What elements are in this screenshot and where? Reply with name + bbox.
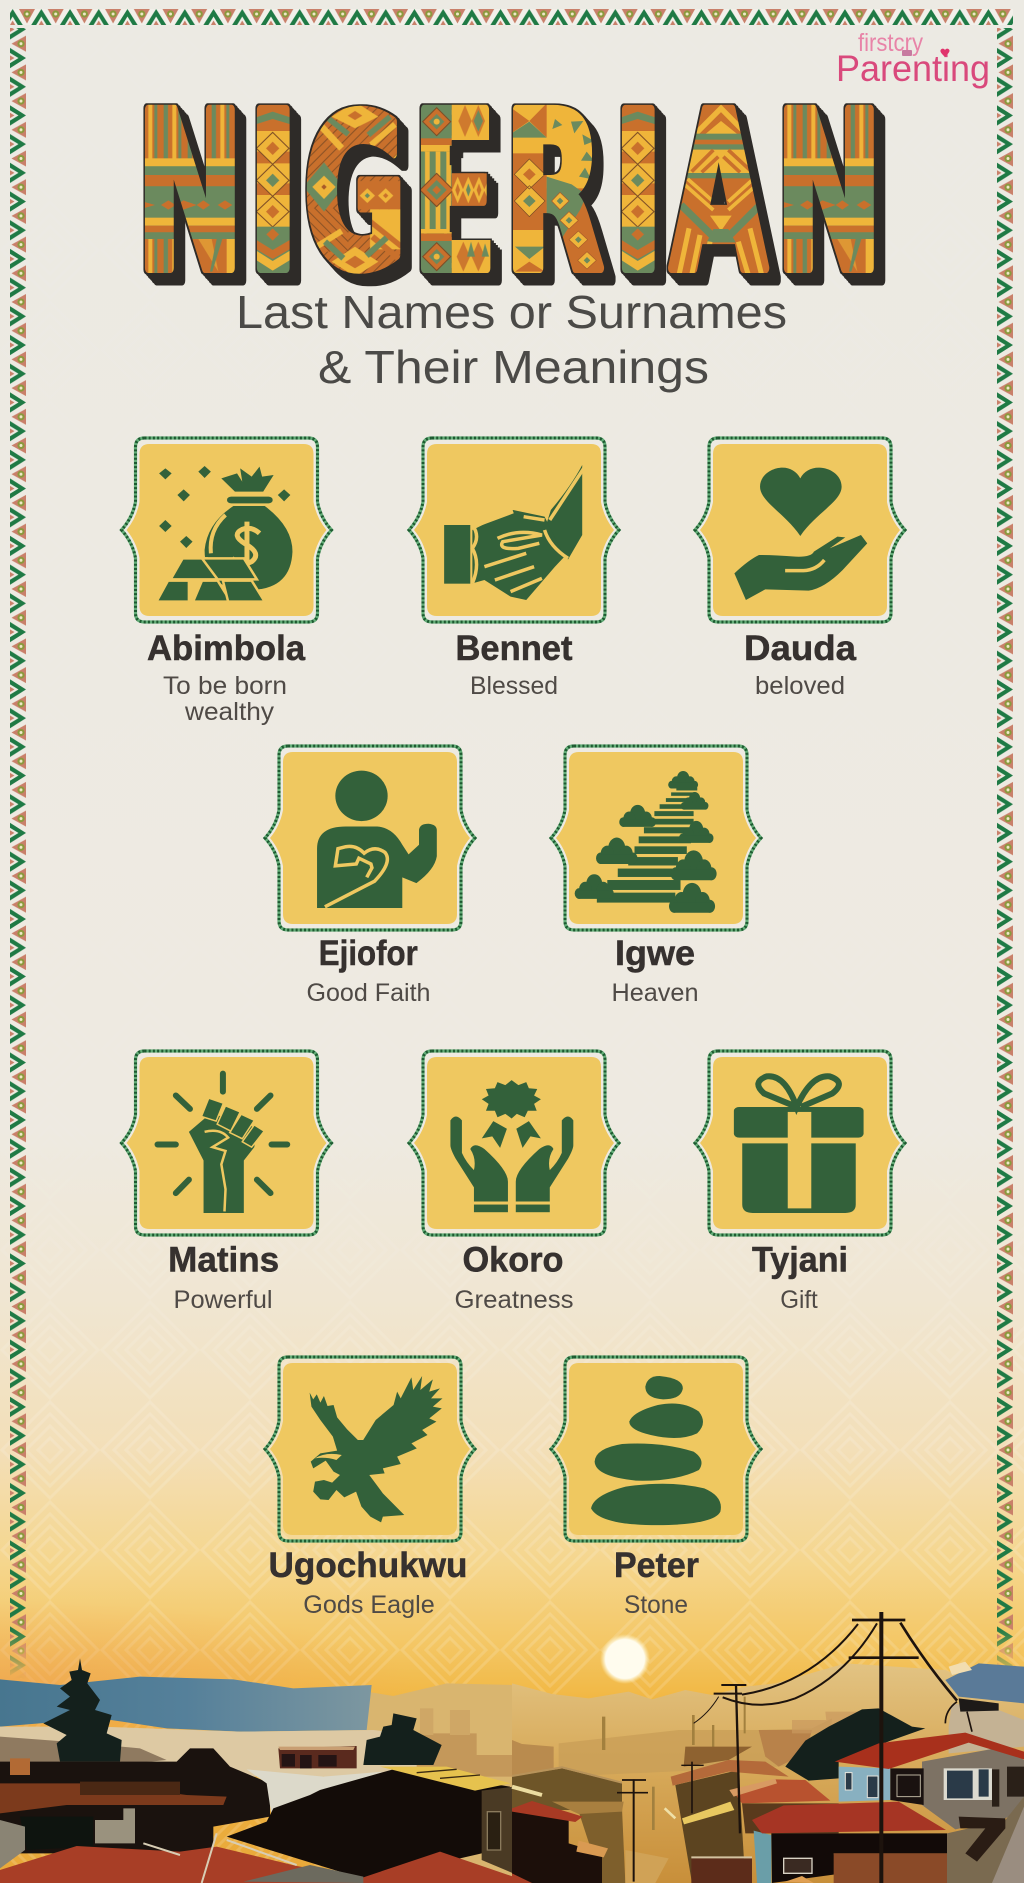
icon: handshake bbox=[444, 465, 584, 600]
icon: raised fist with rays bbox=[158, 1074, 287, 1213]
name: Tyjani bbox=[752, 1240, 848, 1280]
meaning: Powerful bbox=[174, 1286, 272, 1314]
meaning: Gods Eagle bbox=[303, 1591, 435, 1619]
title: NIGERIAN: N bbox=[775, 67, 883, 320]
meaning: To be born bbox=[163, 672, 287, 700]
icon: hands holding award rosette bbox=[450, 1080, 573, 1212]
meaning: Blessed bbox=[470, 672, 558, 700]
meaning: Gift bbox=[780, 1286, 818, 1314]
icon: money bag and gold bars bbox=[156, 466, 292, 602]
meaning: Good Faith bbox=[306, 979, 430, 1007]
name: Igwe bbox=[615, 934, 695, 973]
name: Dauda bbox=[744, 629, 857, 668]
icon: heart over open hand bbox=[734, 468, 867, 600]
scene: left half of town bbox=[0, 1658, 513, 1883]
sun bbox=[600, 1634, 650, 1684]
name: Ejiofor bbox=[319, 934, 418, 973]
card: Matins bbox=[122, 1051, 332, 1314]
card: Ugochukwu bbox=[265, 1357, 475, 1619]
illustration: hazy town skyline at sunset bbox=[0, 1612, 1024, 1883]
title: NIGERIAN: R bbox=[504, 68, 604, 320]
logo: FirstCry Parenting: firstcry bbox=[858, 29, 923, 57]
subtitle: & Their Meanings bbox=[318, 341, 709, 393]
icon: stacked stones bbox=[591, 1376, 721, 1525]
title: NIGERIAN: I bbox=[612, 68, 664, 320]
scene: right half of town bbox=[512, 1612, 1024, 1883]
card: Okoro bbox=[409, 1051, 619, 1314]
subtitle: Last Names or Surnames bbox=[236, 286, 787, 338]
logo: FirstCry Parenting bbox=[836, 29, 990, 89]
icon: stairway to heaven among clouds bbox=[575, 771, 717, 913]
card: Peter bbox=[551, 1357, 761, 1619]
card: Ejiofor bbox=[265, 746, 475, 1007]
name: Bennet bbox=[456, 629, 573, 668]
title: NIGERIAN: A bbox=[670, 67, 767, 319]
name: Abimbola bbox=[147, 629, 306, 668]
icon: gift box bbox=[734, 1076, 864, 1213]
meaning: beloved bbox=[755, 672, 845, 700]
background bbox=[0, 1199, 1024, 1870]
name: Ugochukwu bbox=[268, 1546, 468, 1585]
name: Peter bbox=[614, 1546, 699, 1585]
icon: person with hand on heart bbox=[317, 771, 437, 908]
subtitle bbox=[236, 286, 787, 393]
meaning: Greatness bbox=[454, 1286, 574, 1314]
meaning: wealthy bbox=[184, 698, 275, 726]
name: Okoro bbox=[462, 1240, 564, 1280]
card: Dauda bbox=[695, 438, 905, 700]
logo: FirstCry Parenting: Parenting bbox=[836, 48, 990, 89]
name: Matins bbox=[168, 1240, 279, 1280]
card: Abimbola bbox=[122, 438, 332, 726]
title: NIGERIAN: E bbox=[412, 66, 497, 320]
card: Tyjani bbox=[695, 1051, 905, 1314]
title: NIGERIAN: I bbox=[247, 68, 299, 320]
title: NIGERIAN bbox=[136, 66, 883, 320]
card: Igwe bbox=[551, 746, 761, 1007]
meaning: Heaven bbox=[612, 979, 698, 1007]
title: NIGERIAN: N bbox=[136, 67, 244, 320]
title: NIGERIAN: G bbox=[303, 72, 407, 316]
card: Bennet bbox=[409, 438, 619, 700]
meaning bbox=[163, 672, 287, 726]
icon: eagle bbox=[310, 1376, 442, 1522]
meaning: Stone bbox=[624, 1591, 688, 1619]
